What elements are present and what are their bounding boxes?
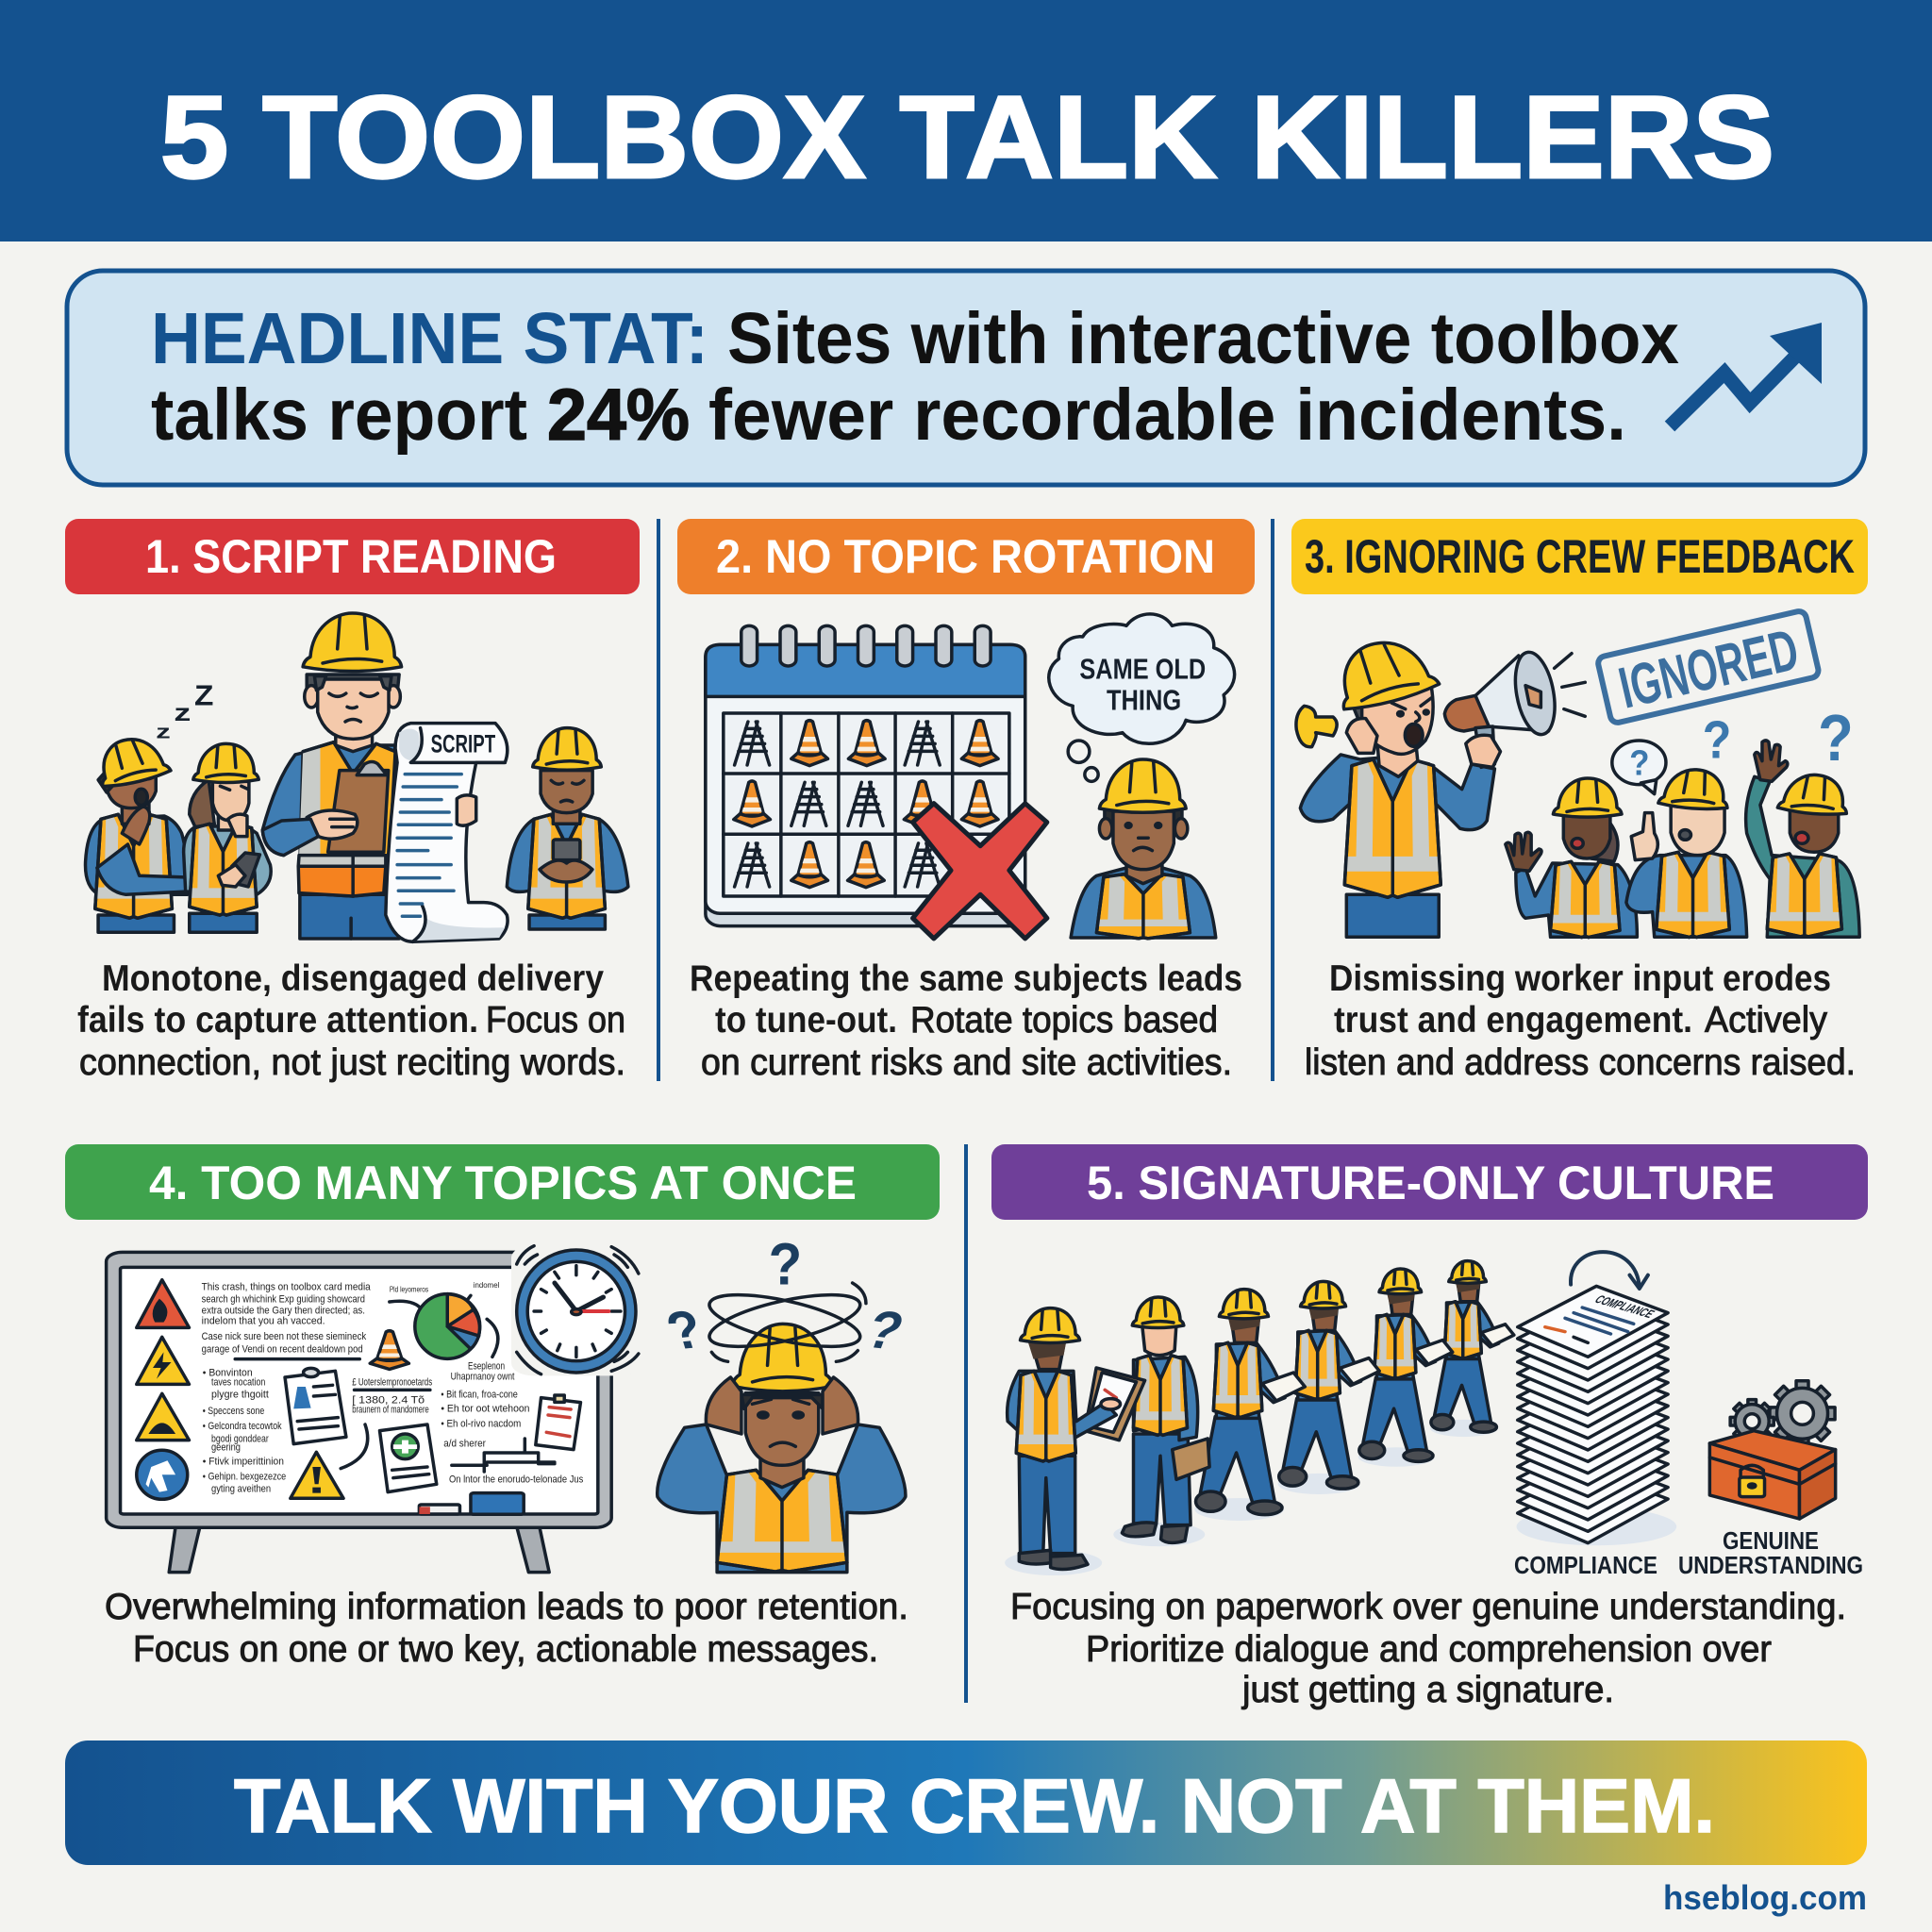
ignored stamp: IGNORED — [1613, 617, 1805, 722]
board text: • Speccens sone — [203, 1406, 264, 1417]
board text: taves nocation — [211, 1376, 265, 1388]
heading: signature-only culture: 5. SIGNATURE-ONLY CULTURE — [1087, 1157, 1774, 1209]
question marks: ? — [659, 1299, 709, 1361]
megaphone — [1468, 656, 1549, 731]
panel: ignoring crew feedback — [1291, 519, 1868, 1083]
board text: plygre thgoitt — [211, 1389, 269, 1400]
hazard signs — [137, 1280, 189, 1499]
board text: gyting aveithen — [211, 1483, 271, 1494]
headline stat callout: talks report — [151, 375, 527, 456]
text: no topic rotation — [690, 958, 1242, 1083]
headline stat callout — [67, 271, 1865, 485]
board text: a/d sherer — [443, 1438, 486, 1449]
question marks: ? — [1703, 710, 1731, 770]
snoring z letters: Z — [194, 679, 213, 711]
text: ignoring crew feedback — [1305, 958, 1856, 1083]
heading: script reading: 1. SCRIPT READING — [145, 530, 557, 583]
board text: • Bonvinton — [203, 1367, 253, 1378]
board text: garage of Vendi on recent dealdown pod — [202, 1343, 363, 1355]
text: no topic rotation: Rotate topics based — [910, 1000, 1218, 1041]
board text: indomel — [474, 1282, 499, 1290]
question marks: ? — [858, 1299, 911, 1361]
board text: • Gelcondra tecowtok — [203, 1421, 282, 1432]
board text: Case nick sure been not these siemineck — [202, 1331, 366, 1342]
board text: Pld leyomeros — [390, 1286, 428, 1293]
text: too many topics: Focus on one or two key, actionable messages. — [133, 1629, 878, 1670]
toolbox with gears — [1709, 1381, 1836, 1519]
heading: signature-only culture — [991, 1144, 1868, 1220]
text: signature-only culture: just getting a signature. — [1241, 1670, 1614, 1710]
source credit: hseblog.com — [1663, 1878, 1867, 1917]
board text: Eseplenon — [468, 1360, 505, 1372]
board text: • Eh ol-rivo nacdom — [441, 1418, 521, 1429]
script scroll — [386, 724, 508, 941]
calendar — [706, 625, 1025, 926]
text: signature-only culture — [1010, 1587, 1846, 1710]
board text: extra outside the Gary then directed; as. — [202, 1305, 365, 1316]
board text: bgodi gonddear — [211, 1433, 269, 1444]
board text: • Eh tor oot wtehoon — [441, 1403, 529, 1414]
text: no topic rotation: to tune-out. — [715, 1000, 897, 1041]
text: script reading — [77, 958, 625, 1083]
panel: script reading — [65, 519, 640, 1083]
worker reading from script — [262, 613, 402, 939]
board text: • Bit fican, froa-cone — [441, 1389, 518, 1400]
headline stat callout: HEADLINE STAT: — [151, 298, 708, 379]
text: no topic rotation: Repeating the same subjects leads — [690, 958, 1242, 999]
text: script reading: Focus on — [486, 1000, 625, 1041]
text: ignoring crew feedback: listen and address concerns raised. — [1305, 1042, 1856, 1083]
snoring z letters — [156, 679, 213, 742]
paper stack — [1517, 1286, 1676, 1545]
board text: geering — [211, 1441, 241, 1453]
heading: no topic rotation — [677, 519, 1255, 594]
clipboards and documents — [285, 1368, 580, 1498]
text: signature-only culture: Focusing on paperwork over genuine understanding. — [1010, 1587, 1846, 1627]
supervisor with megaphone — [1300, 632, 1585, 937]
worker facing front — [1113, 1297, 1209, 1546]
heading: no topic rotation: 2. NO TOPIC ROTATION — [716, 530, 1215, 583]
marker tray — [419, 1493, 524, 1514]
thought bubble — [1049, 614, 1235, 781]
icon: red X — [913, 804, 1047, 939]
text: script reading: fails to capture attention. — [77, 1000, 478, 1041]
board text: search gh whichink Exp guiding showcard — [202, 1293, 365, 1306]
heading: too many topics: 4. TOO MANY TOPICS AT ONCE — [149, 1157, 857, 1209]
board text: This crash, things on toolbox card media — [202, 1281, 371, 1292]
title banner — [0, 0, 1932, 242]
clock — [511, 1245, 641, 1375]
worker yawning — [86, 732, 189, 932]
script scroll: SCRIPT — [431, 730, 495, 758]
line of walking workers — [1194, 1261, 1514, 1521]
board text: • Gehipn. bexgezezce — [203, 1471, 286, 1482]
icon: trend arrow — [1670, 323, 1822, 426]
board text: indelom that you ah vacced. — [202, 1315, 325, 1326]
panel: no topic rotation — [677, 519, 1255, 1083]
question marks — [1612, 700, 1854, 794]
dizzy swirls — [697, 1283, 873, 1361]
question marks: ? — [1818, 700, 1854, 774]
crew member three — [1746, 741, 1859, 937]
text: too many topics: Overwhelming information leads to poor retention. — [105, 1587, 908, 1627]
labels: compliance and understanding — [1514, 1526, 1863, 1579]
illustration: bored crew and script reader — [86, 613, 628, 941]
question marks: ? — [769, 1230, 802, 1297]
labels: compliance and understanding: UNDERSTANDING — [1678, 1551, 1863, 1579]
worker signing clipboard — [1005, 1308, 1145, 1575]
text: ignoring crew feedback: trust and engagement. — [1334, 1000, 1692, 1041]
board text: braunern of mandomere — [352, 1404, 429, 1415]
footer banner: TALK WITH YOUR CREW. NOT AT THEM. — [234, 1764, 1715, 1849]
footer banner — [65, 1740, 1867, 1865]
overwhelmed worker — [658, 1230, 911, 1573]
text: no topic rotation: on current risks and site activities. — [701, 1042, 1232, 1083]
pie chart — [415, 1294, 480, 1358]
illustration: sign-off line and paper stack — [1005, 1252, 1836, 1575]
whiteboard — [107, 1245, 641, 1573]
crew member two — [1626, 767, 1747, 937]
text: ignoring crew feedback: Actively — [1705, 1000, 1827, 1041]
board text — [202, 1281, 583, 1494]
headline stat callout: fewer recordable incidents. — [708, 375, 1626, 456]
labels: compliance and understanding: COMPLIANCE — [1514, 1551, 1657, 1579]
illustration: calendar of repeated topics — [706, 614, 1235, 939]
headline stat callout: 24% — [547, 375, 690, 456]
crew member one — [1506, 778, 1637, 938]
text: script reading: Monotone, disengaged delivery — [102, 958, 604, 999]
worker thinking — [1071, 759, 1216, 939]
board text: • Ftivk imperittinion — [203, 1456, 284, 1467]
ignored stamp — [1597, 610, 1820, 724]
text: signature-only culture: Prioritize dialogue and comprehension over — [1086, 1629, 1772, 1670]
illustration: supervisor ignoring crew — [1296, 610, 1859, 938]
panel: too many topics — [65, 1144, 940, 1670]
heading: too many topics — [65, 1144, 940, 1220]
heading: script reading — [65, 519, 640, 594]
labels: compliance and understanding: GENUINE — [1723, 1526, 1819, 1555]
snoring z letters: z — [174, 700, 191, 726]
board text: £ Uoterslempronoetards — [352, 1376, 432, 1388]
panel: signature-only culture — [991, 1144, 1868, 1710]
text: script reading: connection, not just reciting words. — [79, 1042, 625, 1083]
worker on phone — [184, 743, 271, 932]
board text: [ 1380, 2.4 Tõ — [352, 1394, 425, 1406]
worker with phone on right — [507, 728, 628, 929]
text: ignoring crew feedback: Dismissing worker input erodes — [1329, 958, 1831, 999]
curved arrow — [1571, 1252, 1648, 1289]
headline stat callout: Sites with interactive toolbox — [727, 298, 1679, 379]
thought bubble: SAME OLD — [1079, 653, 1206, 685]
icon: earplug — [1296, 706, 1337, 747]
title banner: 5 TOOLBOX TALK KILLERS — [160, 73, 1774, 203]
text: too many topics — [105, 1587, 908, 1670]
heading: ignoring crew feedback — [1291, 519, 1868, 594]
illustration: overloaded whiteboard and worker — [107, 1230, 911, 1573]
paper stack: COMPLIANCE — [1591, 1292, 1658, 1321]
board text: Uhaprnanoy ownt — [451, 1371, 515, 1382]
whiteboard: On lntor the enorudo-telonade Jus — [449, 1474, 583, 1485]
snoring z letters: z — [156, 721, 171, 742]
question marks: ? — [1629, 743, 1649, 784]
thought bubble: THING — [1107, 684, 1181, 717]
question marks — [659, 1230, 911, 1361]
